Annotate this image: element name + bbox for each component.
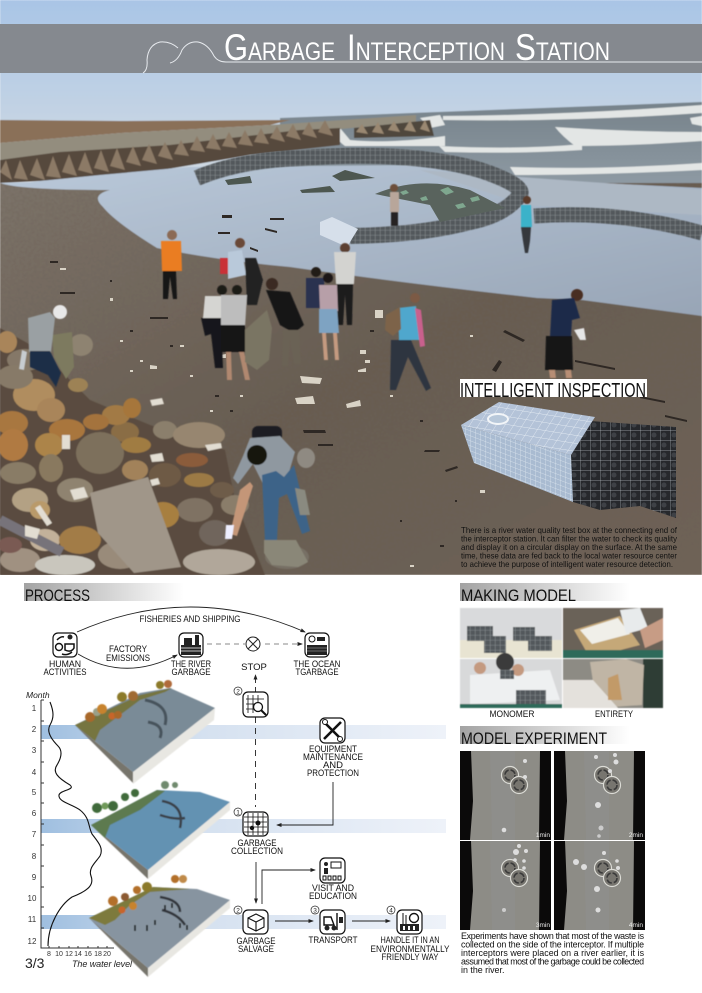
panel: hero beach photo [0,0,702,575]
month title: Month [26,690,50,700]
photo: 3 min: 3min [536,922,550,929]
month labels [28,704,37,946]
marker: step 1: 1 [236,810,240,816]
flow arrows [77,607,390,921]
terrain block 1 [75,680,215,784]
photo: 3 min [460,841,551,930]
title text [224,27,610,68]
label: eco handling: ENVIRONMENTALLY [370,944,450,955]
title text: GARBAGE [224,27,335,68]
person: white shirt with red bag [220,238,263,305]
label: visit and education: VISIT AND [312,883,354,894]
person: white back pair [201,285,250,380]
water level curve [48,702,101,946]
month labels: 2 [32,725,37,734]
photo grid: model experiment [460,751,645,930]
label: garbage collection [231,838,283,857]
icon: river garbage [179,633,203,657]
icon: garbage salvage [243,910,268,934]
label: eco handling: FRIENDLY WAY [382,952,439,963]
water level title: The water level [72,959,133,969]
person: navy shirt right [545,289,586,378]
terrain block 3 [89,875,230,977]
marker: step 1 [234,808,242,816]
icon: transport forklift [320,910,345,934]
rock pile [0,328,315,575]
icon: stop [246,637,260,651]
marker: step 4: 4 [389,908,393,914]
label: eco handling: HANDLE IT IN AN [380,935,440,946]
month labels: 4 [32,768,37,777]
label: maintenance: AND [323,760,343,771]
heading: process: PROCESS [25,586,90,605]
axis labels: 8 [47,951,51,958]
icon: visit and education [320,858,345,883]
person: man on barrier [390,184,399,226]
marker: step 2: 2 [236,908,240,914]
photo: entirety making [563,659,663,708]
garbage sack [245,310,272,370]
title text: STATION [515,27,610,68]
person: navy shirt and dark hair [306,267,325,308]
axis labels [47,951,111,958]
photo: 1 min: 1min [536,832,550,839]
arrow labels: FISHERIES AND SHIPPING [140,614,240,625]
month labels: 10 [28,894,37,903]
person: woman on barrier [521,196,532,253]
panel: intelligent inspection [460,379,678,569]
arrow labels [106,614,240,664]
marker: step 3: 3 [313,908,317,914]
label: river garbage: THE RIVER [171,659,211,670]
month labels: 5 [32,788,37,797]
icon: inspection [243,692,268,717]
photo: 2 min [554,751,645,840]
photo scenery [0,0,702,575]
label: human activities: HUMAN [49,659,81,670]
label: maintenance: MAINTENANCE [303,752,363,763]
person: white tee standing [334,243,356,325]
heading: making model: MAKING MODEL [461,586,576,605]
icon: eco handling plant [397,910,422,934]
month labels: 6 [32,809,37,818]
label: river garbage [171,659,211,678]
label: visit and education [309,883,357,902]
person: orange shirt [161,230,182,299]
interceptor barrier [197,156,702,236]
test box illustration [461,402,676,518]
title text: INTERCEPTION [347,27,505,68]
marker: step 3 [311,906,319,914]
label: garbage salvage [236,936,276,955]
description text: the interceptor station. It can filter the water to check its quality [461,534,678,544]
white lower section [0,575,702,993]
label: visit and education: EDUCATION [309,891,357,902]
label: garbage collection: COLLECTION [231,846,283,857]
person: black jacket [266,278,304,366]
month labels: 7 [32,830,37,839]
axis labels: 14 [74,951,82,958]
person: woman denim shorts [319,273,339,360]
label: garbage salvage: GARBAGE [236,936,276,947]
month labels: 12 [28,937,37,946]
heading: making model [460,583,630,605]
description: experiment: Experiments have shown that most of the waste is [461,931,645,941]
marker: step 2 top [234,687,242,696]
person: bending man [225,426,310,567]
axis labels: 20 [103,951,111,958]
description: experiment: interceptors were placed on a river earlier, it is [461,948,645,958]
tetrapods [0,128,340,183]
photo: 2 min: 2min [629,832,643,839]
description text [461,525,678,569]
description: experiment: in the river. [461,965,504,975]
debris on sand [50,215,687,547]
label: maintenance: PROTECTION [307,768,359,779]
photo: 4 min [554,841,645,930]
icon: human activities [53,633,77,657]
axis labels: 10 [55,951,63,958]
month bands [41,725,446,929]
description: experiment [461,931,645,975]
month labels: 3 [32,746,37,755]
caption: monomer: MONOMER [490,709,535,720]
axis labels: 18 [94,951,102,958]
axis labels: 12 [65,951,73,958]
photo: entirety box [563,608,663,658]
month labels: 8 [32,852,37,861]
label: human activities [44,659,86,678]
month labels: 11 [28,915,37,924]
water level chart [26,690,133,969]
photo: monomer making [460,653,562,708]
collected garbage [225,170,505,222]
label: garbage collection: GARBAGE [238,838,276,849]
terrain block 2 [91,781,230,879]
label: ocean garbage [294,659,341,678]
logo line [143,42,702,73]
label: garbage salvage: SALVAGE [238,944,274,955]
person: left white cap [19,305,74,387]
marker: step 2 [234,906,242,914]
photo grid: making model [460,608,663,708]
icon: ocean garbage [305,633,329,657]
icon: maintenance tools [320,718,345,743]
description text: There is a river water quality test box at the connecting end of [461,525,678,535]
heading: process [24,583,184,605]
marker: step 2 top: 2 [236,688,240,696]
heading: model experiment: MODEL EXPERIMENT [461,729,607,748]
month labels: 9 [32,873,37,882]
label: stop: STOP [241,662,267,673]
white test box [320,217,358,247]
arrow labels: EMISSIONS [106,653,150,664]
waves [336,105,702,190]
page number: 3/3 [25,955,45,971]
label: transport: TRANSPORT [308,935,358,946]
label: eco handling [370,935,450,963]
marker: step 4 [387,906,395,914]
photo: 1 min [460,751,551,840]
label: ocean garbage: THE OCEAN [294,659,341,670]
label: ocean garbage: TGARBAGE [296,667,338,678]
label: human activities: ACTIVITIES [44,667,86,678]
caption: entirety: ENTIRETY [595,709,634,720]
photo: monomer cages [460,608,562,658]
title banner [0,24,702,73]
description: experiment: collected on the side of the interceptor. If multiple [461,940,644,950]
label: river garbage: GARBAGE [172,667,210,678]
description: experiment: assumed that most of the garbage could be collected [461,956,644,966]
person: cyan shirt with backpack [385,293,431,391]
axis labels: 16 [84,951,92,958]
description text: to achieve the purpose of intelligent water resource detection. [461,559,673,569]
label: maintenance: EQUIPMENT [309,744,357,755]
description text: and display it on a circular display on the surface. At the same [461,542,677,552]
description text: time, these data are fed back to the local water resource center [461,550,677,560]
month labels: 1 [32,704,37,713]
people [19,184,586,567]
photo: 4 min: 4min [629,922,643,929]
label: maintenance [303,744,363,779]
icon: garbage collection [243,812,268,836]
arrow labels: FACTORY [109,644,148,655]
